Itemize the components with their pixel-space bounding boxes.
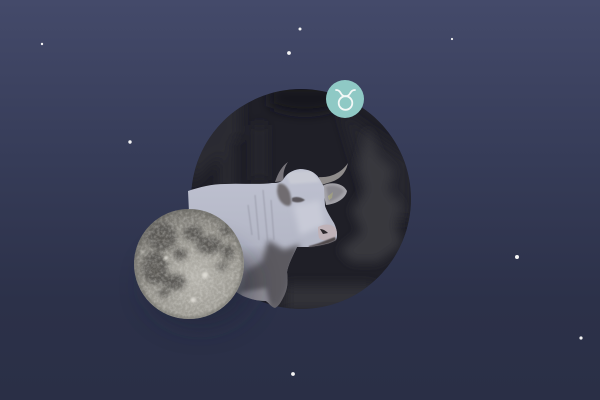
dark forest disc: [190, 86, 412, 311]
cow ear: [322, 183, 347, 205]
lunar maria: [142, 223, 234, 297]
cow body and head: [188, 169, 338, 308]
full moon: [134, 209, 244, 319]
stars: [41, 28, 583, 376]
moon shadow: [148, 245, 252, 325]
cow face details: [277, 184, 344, 247]
taurus symbol: [336, 90, 355, 110]
lunar highlights: [142, 251, 208, 302]
cow horns: [275, 162, 348, 185]
cow shading: [240, 171, 325, 306]
lunar surface grain: [134, 209, 244, 319]
taurus badge: [326, 80, 364, 118]
cow: [185, 162, 348, 310]
lunar limb: [135, 210, 243, 318]
